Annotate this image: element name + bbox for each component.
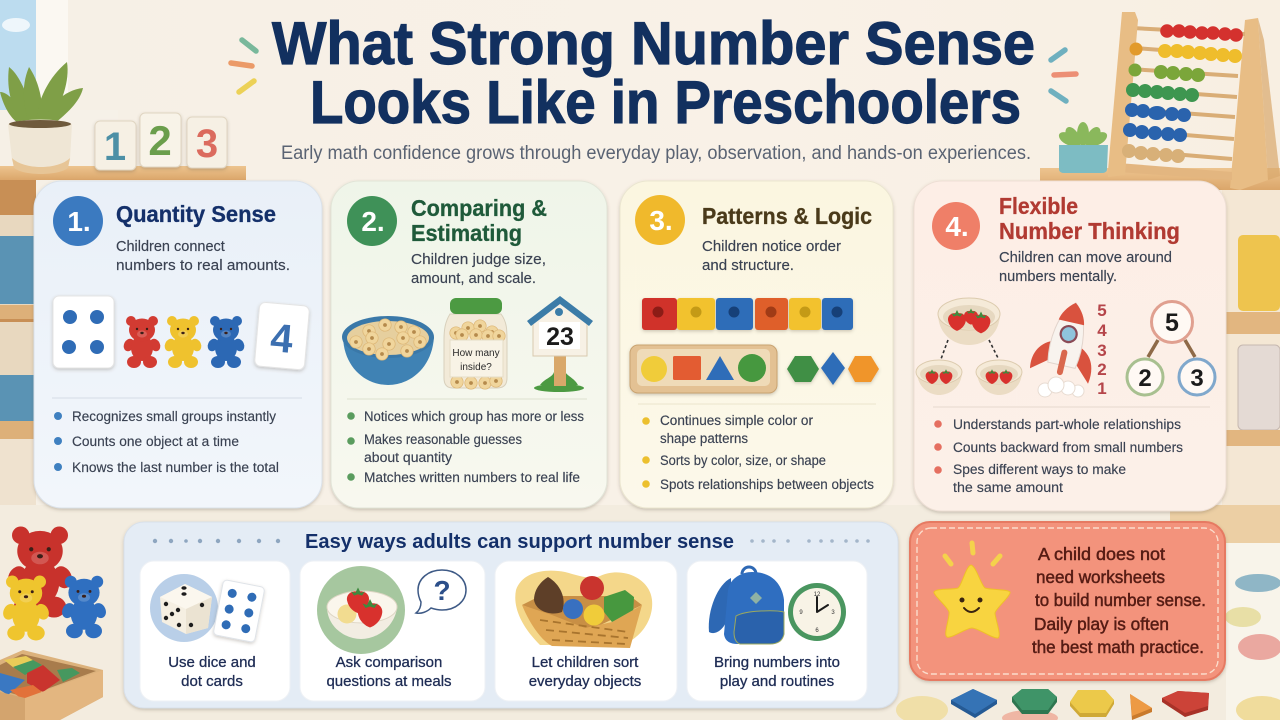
badge 4 [932,202,980,250]
countdown numbers [1097,301,1107,398]
icon: fruit bowl and speech bubble [317,566,466,654]
badge 2 [347,196,397,246]
icon: wooden shape tray [630,345,777,393]
bullet list: the same amount [953,480,1063,495]
message text: the best math practice. [1032,637,1204,657]
caption: everyday objects [529,673,641,690]
heading: Patterns & Logic [702,203,872,229]
icon: backpack [709,567,784,644]
message text: A child does not [1038,544,1165,564]
message text [1032,544,1206,657]
description: numbers mentally. [999,269,1117,285]
panel: patterns and logic [620,181,893,508]
description: and structure. [702,258,794,274]
panel: easy ways adults can support [124,522,898,708]
description [999,250,1172,285]
heading: Flexible [999,193,1078,219]
icon: rocket [1029,296,1106,397]
bullet list: shape patterns [660,431,748,446]
label [450,340,503,377]
window [0,0,118,130]
bullet list: Makes reasonable guesses [364,432,522,447]
icon: clock: 3 [831,610,835,616]
countdown numbers: 2 [1097,360,1107,379]
callout: key message [910,522,1225,680]
icon: number card four: 4 [269,316,295,362]
heading: Estimating [411,220,522,246]
icon: succulent in teal pot [1057,122,1109,173]
description: Children notice order [702,239,841,255]
description: numbers to real amounts. [116,258,290,274]
panel: quantity sense [34,181,322,508]
bullet list [54,409,279,475]
icon: number bond: 3 [1190,365,1204,392]
badge 1 [53,196,103,246]
caption [326,654,452,690]
icon: number blocks 1 2 3 [95,113,227,170]
message text: need worksheets [1036,567,1165,587]
caption [168,654,256,690]
title: What Strong Number Sense [272,10,1035,77]
heading [411,195,547,246]
countdown numbers: 5 [1097,301,1107,320]
right shelf unit [1222,190,1280,510]
icon: number bond: 5 [1165,309,1179,337]
icon: large counting bears [1,526,108,640]
card: sorting [495,561,677,701]
icon: potted plant [0,62,83,174]
caption: Let children sort [532,654,639,671]
rug floor [0,505,1280,720]
message text: to build number sense. [1035,590,1206,610]
label: inside? [460,362,492,373]
icon: fruit bowl and speech bubble: ? [433,575,451,606]
title [272,10,1035,136]
decoration: left sparks [231,40,256,92]
countdown numbers: 1 [1097,379,1107,398]
icon: green hexagon [787,356,819,382]
caption: questions at meals [326,673,452,690]
icon: linking cube row [642,298,853,330]
description: amount, and scale. [411,271,536,287]
beads [1122,24,1243,163]
icon: yellow bear [163,316,203,368]
caption: dot cards [181,673,243,690]
bullet list: about quantity [364,450,452,465]
bullet list: Continues simple color or [660,413,813,428]
description [411,252,546,287]
icon: dot card four [53,296,114,368]
icon: clock: 12 [814,592,821,598]
icon: part-whole strawberry bowls [916,298,1022,395]
card: dice [140,561,290,701]
icon: orange hexagon [848,356,879,382]
bullet list: Notices which group has more or less [364,409,584,424]
right wooden ledge [1040,168,1280,190]
bullet list: Counts backward from small numbers [953,440,1183,455]
heading: Comparing & [411,195,547,221]
bullet list: Matches written numbers to real life [364,470,580,485]
icon: wooden abacus [1108,12,1280,190]
title: Looks Like in Preschoolers [310,69,1021,136]
badge 3 [635,195,685,245]
icon: clock: 6 [815,628,819,634]
badge 4: 4. [945,211,969,242]
description: Children judge size, [411,252,546,268]
countdown numbers: 3 [1097,341,1107,360]
bullet list [934,417,1183,495]
bullet list: Knows the last number is the total [72,460,279,475]
bullet list [642,413,874,492]
icon: birdhouse number sign [527,296,593,392]
panel: flexible number thinking [914,181,1226,511]
icon: dice and dot card [150,574,265,642]
heading [999,193,1180,244]
icon: blue diamond [821,352,845,385]
bullet list: Understands part-whole relationships [953,417,1181,432]
subtitle: Early math confidence grows through everyday play, observation, and hands-on experiences. [281,143,1031,164]
heading: Number Thinking [999,218,1180,244]
icon: smiling star [934,543,1010,638]
decoration: right sparks [1051,50,1076,101]
panel: comparing and estimating [331,181,607,508]
countdown numbers: 4 [1097,321,1107,340]
description: Children connect [116,239,225,255]
icon: number bond [1127,302,1215,395]
message text: Daily play is often [1034,614,1169,634]
icon: box of blocks [0,650,103,720]
bullet list [347,409,584,485]
icon: basket of objects [515,571,652,648]
block 1: 1 [104,125,126,169]
badge 3: 3. [649,205,673,236]
bullet list: Sorts by color, size, or shape [660,453,826,468]
icon: cereal bowl [342,316,434,385]
heading: Easy ways adults can support number sense [305,530,734,553]
heading: Quantity Sense [116,201,276,227]
description: Children can move around [999,250,1172,266]
icon: clock [788,583,846,641]
block 3: 3 [196,122,218,166]
description [702,239,841,274]
icon: blue bear [206,316,246,368]
icon: clock: 9 [799,610,803,616]
rods [1125,28,1245,159]
bullet list: Spes different ways to make [953,462,1126,477]
icon: glass jar [444,298,507,389]
icon: red bear [122,316,162,368]
icon: number bond: 2 [1138,365,1152,392]
icon: pattern block shapes on rug [951,689,1209,720]
left shelf unit [0,166,246,520]
bullet list: Recognizes small groups instantly [72,409,276,424]
bullet list: Counts one object at a time [72,434,239,449]
card: meals [300,561,485,701]
icon: birdhouse number sign: 23 [546,323,574,351]
caption: Ask comparison [336,654,442,671]
caption [714,654,840,690]
decorative dots left [153,539,280,543]
badge 2: 2. [361,206,385,237]
icon: number card four [254,302,310,370]
description [116,239,290,274]
badge 1: 1. [67,206,91,237]
caption: Use dice and [168,654,256,671]
card: routines [687,561,867,701]
caption: play and routines [720,673,834,690]
block 2: 2 [148,117,172,164]
label: How many [452,348,500,359]
caption [529,654,641,690]
bullet list: Spots relationships between objects [660,477,874,492]
caption: Bring numbers into [714,654,840,671]
decorative dots right [750,539,870,543]
